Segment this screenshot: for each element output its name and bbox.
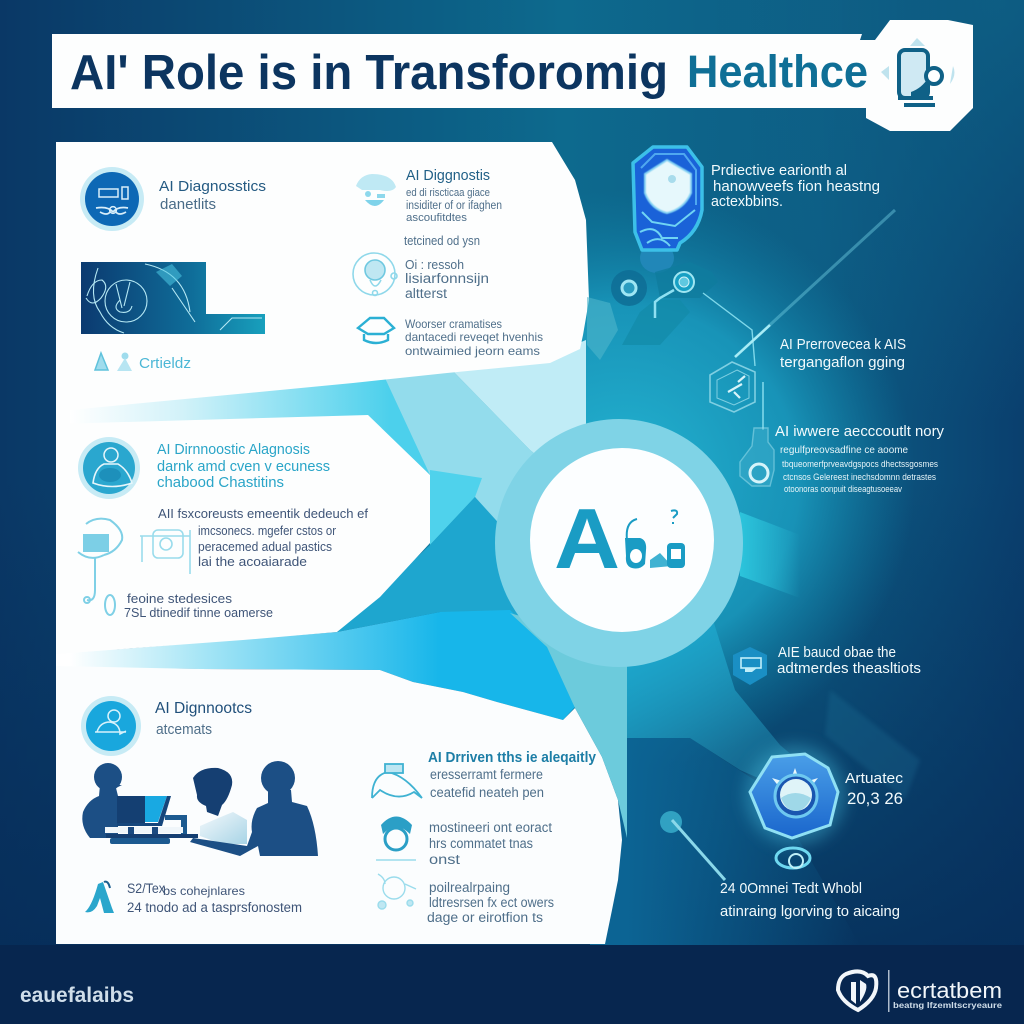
text: Artuatec stat: 20,3 26 bbox=[847, 789, 903, 808]
icon: cap bbox=[358, 318, 394, 343]
icon: predictive shield device bbox=[633, 147, 702, 273]
person middle bbox=[193, 768, 247, 844]
hub: central AI circle bbox=[495, 419, 743, 838]
text: brain sketch item: ldtresrsen fx ect owers bbox=[429, 895, 554, 910]
text: AI iwwere: otoonoras oonpuit diseagtusoeeav bbox=[784, 484, 902, 495]
icon: stethoscope laptop bbox=[78, 519, 122, 615]
text: AI prerrovecea: AI Prerrovecea k AIS bbox=[780, 336, 906, 353]
text: AI driven bbox=[428, 749, 597, 800]
icon: brain circle bbox=[353, 253, 397, 296]
label: Crtieldz with icons bbox=[95, 352, 191, 372]
text: cap item: ontwaimied jeorn eams bbox=[405, 344, 540, 358]
heading: AI diagnostic: chabood Chastitins bbox=[157, 474, 284, 491]
text: AI Diagnostis list: AI Diggnostis bbox=[406, 167, 490, 184]
icon: medical devices bbox=[625, 510, 685, 568]
text: cap item bbox=[405, 317, 543, 358]
text: middle body: 7SL dtinedif tinne oamerse bbox=[124, 606, 273, 620]
text: AI Diagnostis list bbox=[404, 167, 502, 248]
text: predictive bbox=[711, 162, 880, 210]
AI letter: A bbox=[554, 492, 620, 587]
text: middle body: imcsonecs. mgefer cstos or bbox=[198, 523, 337, 538]
logo text: ecrtatbem bbox=[897, 978, 1002, 1003]
text: Omnei stat: atinraing lgorving to aicaing bbox=[720, 903, 900, 920]
icon: diagnostics badge bbox=[80, 167, 144, 231]
text: brain sketch item: poilrealrpaing bbox=[429, 880, 510, 895]
icon: monitor hexagon bbox=[733, 647, 767, 685]
icon: brain sketch bbox=[378, 874, 416, 909]
panel: middle diagnostic bbox=[56, 415, 430, 654]
title text: AI' Role is in Transforomig bbox=[70, 46, 668, 100]
text: cap item: dantacedi reveqet hvenhis bbox=[405, 330, 543, 344]
icon: doctor badge bbox=[78, 437, 140, 499]
person right bbox=[190, 761, 318, 856]
text: brain item: Oi : ressoh bbox=[405, 257, 464, 272]
callout: A icon stat: 24 tnodo ad a tasprsfonostem bbox=[127, 900, 302, 915]
heading: AI Diagnostics: AI Diagnosstics bbox=[159, 178, 266, 195]
icon: lab flask bbox=[740, 428, 774, 486]
text: AI prerrovecea: tergangaflon gging bbox=[780, 354, 905, 371]
text: AI driven: AI Drriven tths ie aleqaitly bbox=[428, 749, 597, 766]
heading: AI Dignnootcs: atcemats bbox=[156, 721, 212, 738]
image: scan illustration bbox=[81, 262, 265, 334]
text: head item: hrs commatet tnas bbox=[429, 836, 533, 851]
title banner bbox=[52, 20, 973, 131]
heading: AI diagnostic: AI Dirnnoostic Alagnosis bbox=[157, 441, 310, 458]
text: AI Diagnostis list: insiditer of or ifaghen bbox=[406, 200, 502, 212]
text: middle body: feoine stedesices bbox=[127, 592, 232, 606]
icon: logo mark bbox=[838, 970, 890, 1012]
icon: stethoscope cloud bbox=[356, 174, 396, 206]
text: AI iwwere: AI iwwere aecccoutlt nory bbox=[775, 424, 945, 440]
text: Artuatec stat bbox=[845, 770, 904, 808]
text: AI Diagnostis list: ascoufitdtes bbox=[406, 212, 468, 224]
heading: AI diagnostic bbox=[157, 441, 330, 491]
text: AI iwwere bbox=[775, 424, 945, 495]
person left bbox=[82, 763, 122, 838]
callout: A icon stat: bs cohejnlares bbox=[163, 884, 245, 898]
text: AI Diagnostis list: tetcined od ysn bbox=[404, 233, 480, 248]
text: brain item: altterst bbox=[405, 286, 447, 301]
text: Omnei stat bbox=[720, 880, 900, 920]
heading: AI diagnostic: darnk amd cven v ecuness bbox=[157, 458, 330, 475]
starburst behind the white panels bbox=[56, 340, 586, 720]
text: AI iwwere: ctcnsos Gelereest inechsdomnn detrastes bbox=[783, 472, 936, 483]
text: predictive: Prdiective earionth al bbox=[711, 162, 847, 179]
heading: AI Dignnootcs bbox=[155, 700, 252, 738]
text: brain sketch item bbox=[427, 880, 554, 925]
text: cap item: Woorser cramatises bbox=[405, 317, 502, 331]
icon: scanner outline bbox=[140, 530, 190, 574]
text: Artuatec stat: Artuatec bbox=[845, 770, 904, 787]
text: AI iwwere: regulfpreovsadfine ce aoome bbox=[780, 444, 908, 456]
text: predictive: hanowveefs fion heastng bbox=[713, 178, 880, 195]
monitor bbox=[105, 796, 198, 844]
callout: A icon stat: S2/Tex bbox=[127, 880, 165, 896]
text: brain item bbox=[405, 257, 489, 301]
icon: head outline bbox=[376, 816, 416, 860]
icon: patient badge bbox=[81, 696, 141, 756]
text: middle body: lai the acoaiarade bbox=[198, 554, 307, 569]
text: middle body: peracemed adual pastics bbox=[198, 539, 332, 554]
logo text: beatng Ifzemltscryeaure bbox=[893, 1000, 1002, 1010]
panel: top diagnostics bbox=[56, 142, 589, 410]
icon: health mug bbox=[881, 38, 954, 107]
text: brain item: lisiarfonnsijn bbox=[405, 271, 489, 286]
text: head item: onst bbox=[429, 852, 460, 867]
text: middle body bbox=[124, 506, 368, 620]
icon: probe line bbox=[660, 811, 725, 880]
text: brain sketch item: dage or eirotfion ts bbox=[427, 910, 543, 925]
text: AI Diagnostis list: ed di riscticaa giace bbox=[406, 187, 490, 199]
text: AI driven: eresserramt fermere bbox=[430, 767, 543, 782]
footer brand left: eauefalaibs bbox=[20, 984, 134, 1007]
callout: A icon stat bbox=[85, 880, 302, 915]
icon: automation gear badge bbox=[745, 745, 845, 868]
text: Omnei stat: 24 0Omnei Tedt Whobl bbox=[720, 880, 862, 897]
text: AIE baucd: adtmerdes theasltiots bbox=[777, 660, 921, 677]
icon: hexagon molecule bbox=[710, 362, 755, 412]
text: AIE baucd bbox=[777, 644, 921, 677]
illustration: clinicians at computer bbox=[82, 761, 318, 856]
heading: AI Diagnostics: danetlits bbox=[160, 196, 216, 213]
logo text bbox=[893, 978, 1002, 1010]
footer logo bbox=[838, 970, 1002, 1012]
text: head item: mostineeri ont eoract bbox=[429, 820, 552, 835]
panel: bottom diagnostics bbox=[56, 666, 622, 944]
text: AI driven: ceatefid neateh pen bbox=[430, 785, 544, 800]
heading: AI Diagnostics bbox=[159, 178, 266, 213]
text: middle body: AII fsxcoreusts emeentik dedeuch ef bbox=[158, 506, 368, 521]
heading: AI Dignnootcs: AI Dignnootcs bbox=[155, 700, 252, 717]
icon: robot dome bbox=[372, 764, 422, 798]
connectors and nodes bbox=[587, 210, 895, 430]
text: head item bbox=[429, 820, 552, 867]
text: AI iwwere: tbqueomerfprveavdgspocs dhectssgosmes bbox=[782, 459, 938, 470]
title text: Healthce bbox=[687, 46, 868, 97]
text: predictive: actexbbins. bbox=[711, 193, 783, 210]
text: AI prerrovecea bbox=[780, 336, 906, 371]
text: AIE baucd: AIE baucd obae the bbox=[778, 644, 896, 661]
label: Crtieldz with icons: Crtieldz bbox=[139, 355, 191, 372]
